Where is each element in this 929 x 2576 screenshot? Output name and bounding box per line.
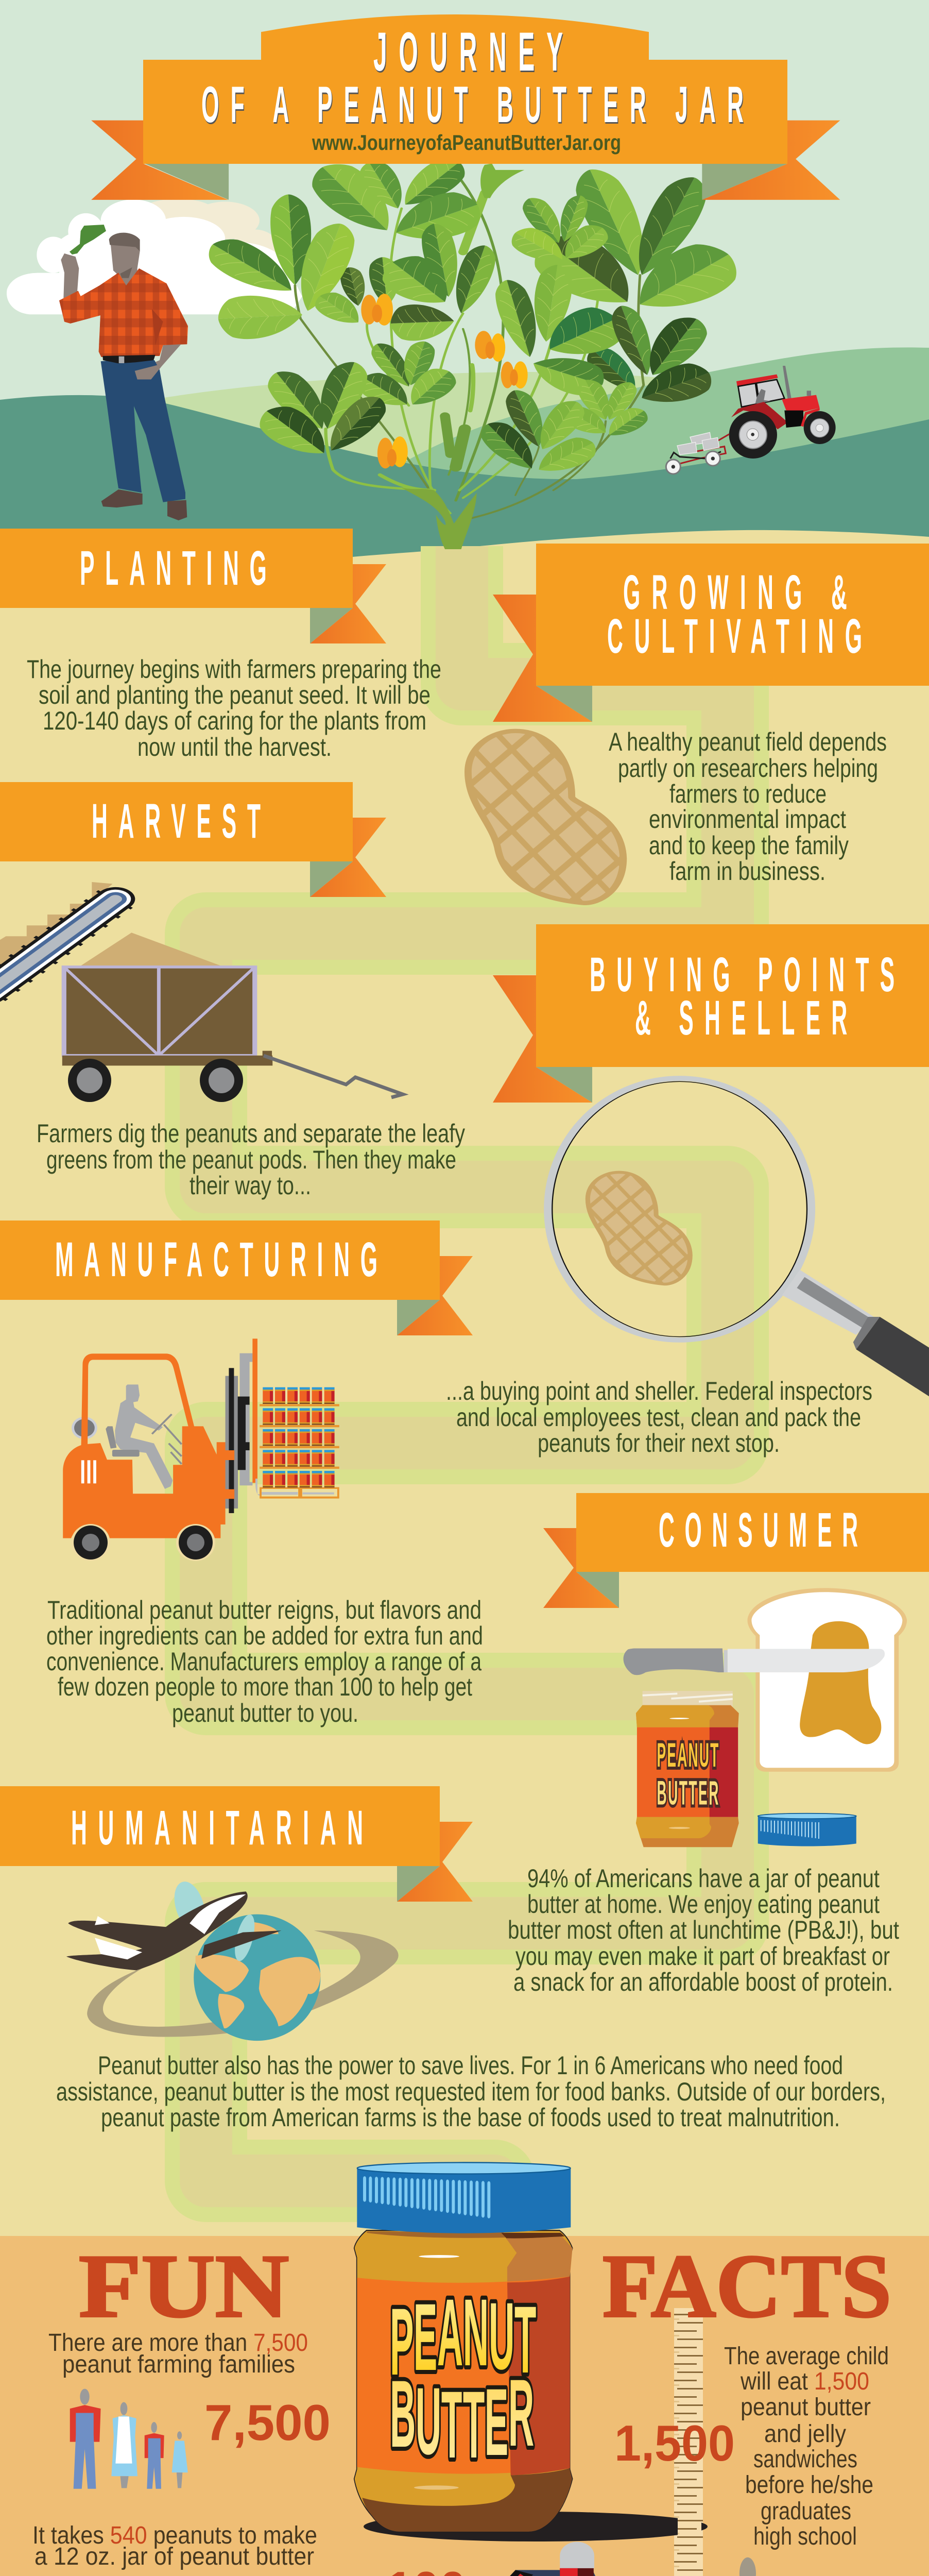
forklift wheels (71, 1524, 215, 1561)
section banner: humanitarian (0, 1786, 473, 1902)
website: www.JourneyofaPeanutButterJar.org (312, 130, 621, 155)
section banner: planting: PLANTING (80, 540, 267, 596)
peanut plant (198, 152, 751, 549)
banner shape (143, 14, 787, 164)
fact: sandwiches: sandwiches (753, 2446, 857, 2473)
tractor (666, 366, 836, 474)
text: planting: now until the harvest. (137, 733, 332, 761)
fun facts background (0, 2236, 929, 2576)
big peanut butter jar (354, 2162, 573, 2532)
text: humanitarian (56, 2051, 886, 2132)
text: planting: The journey begins with farmers preparing the (27, 655, 441, 684)
section banner: buying points and sheller (493, 924, 929, 1103)
big jar logo (390, 2279, 536, 2478)
section banner: buying points and sheller: & SHELLER (635, 990, 847, 1045)
orbit ring (87, 1930, 399, 2037)
wagon load (80, 933, 222, 966)
text: manufacturing: peanut butter to you. (172, 1699, 358, 1727)
stack over shadow (678, 2514, 701, 2542)
wagon hitch arm (264, 1056, 403, 1097)
title line 2: OF A PEANUT BUTTER JAR (201, 77, 744, 133)
illustration: harvest wagon (0, 882, 272, 1065)
heading: facts: FACTS (603, 2236, 891, 2336)
illustration: toast, knife, jar and lid (623, 1588, 907, 1847)
text: growing: farm in business. (669, 857, 825, 886)
title line 1: JOURNEY (373, 21, 563, 82)
text: harvest: Farmers dig the peanuts and separate the leafy (37, 1119, 465, 1148)
number: 1,500: 1,500 (614, 2415, 735, 2471)
cloud (7, 199, 302, 314)
text: manufacturing: Traditional peanut butter reigns, but flavors and (47, 1596, 481, 1624)
jar label text: PEANUT (657, 1736, 718, 1774)
fact: farming families (48, 2329, 308, 2378)
icon: farm family (70, 2389, 188, 2489)
word: butter: BUTTER (390, 2360, 534, 2478)
section banner: planting (0, 529, 386, 643)
forklift mast (226, 1338, 261, 1513)
text: harvest: greens from the peanut pods. Then they make (46, 1145, 456, 1174)
fact: sandwiches: and jelly (764, 2420, 846, 2448)
section banner: harvest: HARVEST (92, 793, 261, 849)
section banner: growing and cultivating: CULTIVATING (607, 608, 862, 664)
section banner: growing and cultivating (493, 544, 929, 722)
text: buying point (446, 1377, 872, 1458)
daughter (172, 2431, 188, 2488)
section banner: consumer (543, 1493, 929, 1608)
text: growing: and to keep the family (649, 831, 849, 860)
plant stalk base (402, 488, 477, 549)
text: growing (609, 727, 887, 886)
wagon box (62, 967, 272, 1065)
section banner: consumer: CONSUMER (659, 1502, 858, 1557)
person eating sandwich (711, 2557, 777, 2576)
father (70, 2389, 101, 2489)
text: manufacturing: convenience. Manufacturers employ a range of a (46, 1647, 481, 1676)
text: manufacturing: other ingredients can be added for extra fun and (46, 1621, 483, 1650)
section banner: humanitarian: HUMANITARIAN (71, 1800, 363, 1855)
hills (0, 347, 929, 618)
fact: sandwiches: The average child (724, 2343, 889, 2370)
barn (477, 2542, 614, 2576)
section banner: growing and cultivating: GROWING & (623, 565, 847, 620)
fact: sandwiches: before he/she (745, 2471, 873, 2499)
text: growing: farmers to reduce (669, 779, 827, 808)
peanut butter jar (636, 1691, 739, 1847)
text: buying point: peanuts for their next stop. (538, 1429, 780, 1458)
word: peanut: PEANUT (390, 2279, 536, 2395)
text: consumer (508, 1864, 899, 1996)
icon: peanut shell (468, 731, 623, 903)
text: harvest (37, 1119, 465, 1200)
text: growing: environmental impact (649, 805, 846, 834)
fact: sandwiches: high school (753, 2523, 857, 2550)
jar label text: BUTTER (657, 1774, 718, 1812)
airplane (66, 1880, 281, 1970)
globe (194, 1914, 320, 2041)
jar label text (657, 1736, 718, 1812)
toast (747, 1588, 907, 1772)
farmer (59, 225, 188, 520)
plant leaves (198, 152, 751, 480)
fact: sandwiches: will eat 1,500 (740, 2368, 869, 2395)
fact: farming families: There are more than 7,500 (48, 2329, 308, 2357)
son (145, 2422, 164, 2489)
section banner: buying points and sheller: BUYING POINTS (590, 947, 894, 1002)
forklift body (63, 1353, 234, 1538)
right ribbon tail (702, 121, 840, 200)
wagon auger (0, 882, 115, 992)
knife (623, 1648, 885, 1675)
section banner: harvest (0, 782, 386, 897)
fact: sandwiches: peanut butter (741, 2394, 871, 2421)
number: 7,500: 7,500 (204, 2394, 331, 2451)
winding path (206, 546, 728, 2236)
illustration: airplane over globe (66, 1880, 399, 2041)
section banner: manufacturing: MANUFACTURING (55, 1232, 377, 1287)
illustration: forklift with pallet of jars (63, 1338, 339, 1538)
plant stems (295, 165, 644, 523)
wagon wheels (68, 1059, 243, 1102)
background: sky (0, 0, 929, 567)
magnified peanut (588, 1172, 690, 1284)
jar shadow (364, 2512, 708, 2541)
fact: peanuts per jar: It takes 540 peanuts to make (32, 2522, 317, 2549)
title banner (91, 14, 840, 200)
fact: peanuts per jar: a 12 oz. jar of peanut butter (35, 2543, 314, 2570)
text: manufacturing: few dozen people to more than 100 to help get (58, 1672, 472, 1701)
text: planting (27, 655, 441, 761)
jar lid (357, 2162, 571, 2233)
fact: sandwiches: graduates (761, 2498, 851, 2525)
forklift driver (106, 1384, 182, 1489)
loose lid (758, 1814, 856, 1846)
plant bud (480, 163, 524, 198)
fact: farming families: peanut farming families (62, 2351, 295, 2378)
left ribbon tail (91, 121, 229, 200)
text: harvest: their way to... (190, 1171, 311, 1200)
magnifier handle (782, 1270, 929, 1396)
mother (111, 2402, 137, 2488)
icon: magnifying glass with peanut (548, 1078, 929, 1396)
text: manufacturing (46, 1596, 483, 1727)
jar body (354, 2230, 573, 2532)
heading: fun: FUN (79, 2236, 289, 2336)
section banner: manufacturing (0, 1221, 473, 1335)
stack of sandwiches (674, 2308, 703, 2576)
plant flowers (361, 294, 528, 468)
icons: sack, arrow, barn, person (62, 2542, 777, 2576)
fact: peanuts per jar (32, 2522, 317, 2570)
text: planting: soil and planting the peanut seed. It will be (39, 681, 431, 709)
text: planting: 120-140 days of caring for the plants from (43, 706, 426, 735)
jar label (357, 2277, 570, 2474)
fact: sandwiches (724, 2343, 889, 2550)
pallet of jars (260, 1387, 339, 1499)
